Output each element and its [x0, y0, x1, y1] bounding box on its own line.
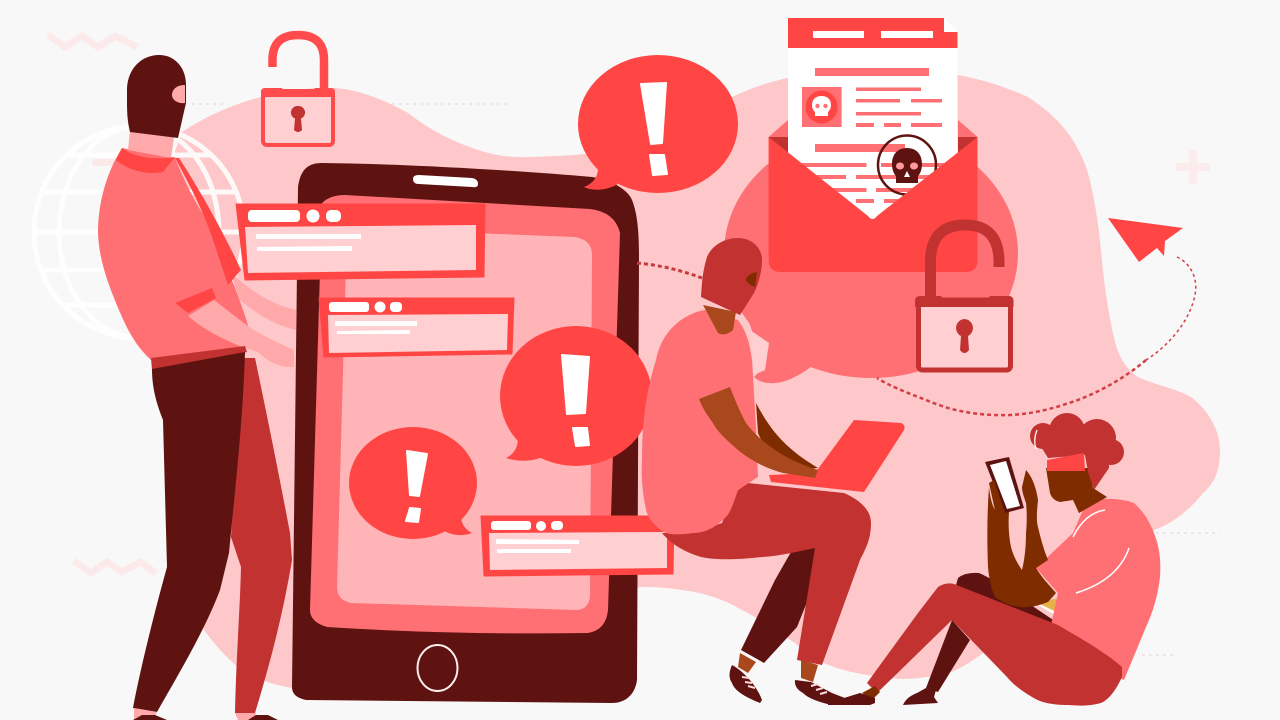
dotted flight path: [877, 257, 1196, 415]
hacker balaclava: [127, 55, 186, 138]
front thigh and shin: [867, 583, 1122, 706]
hacker front leg: [133, 352, 245, 712]
background blob: [150, 75, 1220, 688]
front ankle: [801, 660, 818, 682]
globe outline: [34, 126, 244, 338]
envelope back flap: [769, 120, 978, 137]
back shoe: [730, 665, 762, 703]
back arm: [756, 403, 818, 470]
back leg: [741, 545, 830, 663]
hacker neck: [128, 130, 174, 158]
collar highlight: [750, 330, 769, 375]
document sheet: [788, 40, 958, 225]
dotted path: phone to person: [637, 263, 702, 278]
head and neck: [1046, 468, 1107, 513]
document header: [788, 18, 958, 48]
phone inner screen: [337, 228, 592, 610]
back shoe: [903, 688, 938, 705]
document thumbnail skull: [802, 87, 842, 127]
front shoe: [795, 680, 850, 705]
large padlock keyhole: [956, 319, 973, 353]
front shoe: [828, 693, 875, 705]
hacker figure: [98, 55, 296, 720]
hair: [1030, 413, 1124, 490]
large padlock body: [918, 300, 1010, 370]
hacker shoes: [133, 715, 278, 720]
waist highlight: [1038, 598, 1060, 618]
person with smartphone: [828, 413, 1160, 706]
padlock keyhole: [291, 106, 305, 132]
phone home button: [418, 645, 458, 691]
smartphone: [292, 163, 639, 703]
decorative zigzag: lower left: [74, 561, 156, 573]
open padlock: top: [261, 35, 335, 145]
torso: [642, 310, 758, 534]
smartphone in hand: [985, 457, 1024, 513]
speech bubble: middle alert: [500, 326, 652, 466]
waist shadow: [956, 573, 1058, 630]
phone speaker: [413, 175, 478, 187]
hacker back leg: [231, 358, 292, 713]
alert card one: [236, 204, 485, 280]
shirt folds: [1073, 510, 1129, 593]
hacker forearm and hand: [188, 300, 294, 367]
decorative plus sign: [1176, 150, 1210, 184]
speech bubble: lower alert: [349, 427, 477, 539]
back ankle: [738, 653, 756, 673]
large padlock shackle: [930, 225, 999, 297]
paper plane: [1108, 218, 1183, 262]
front ankle: [862, 686, 880, 700]
person with laptop: [642, 238, 905, 705]
padlock shackle: [272, 35, 324, 92]
raised arms: [987, 470, 1056, 607]
envelope with document: [769, 18, 978, 272]
hacker ankles: [134, 708, 256, 720]
hacker collar: [116, 148, 175, 173]
phone screen frame: [310, 195, 620, 633]
hacker sleeve cuff: [175, 288, 216, 313]
envelope front: [769, 137, 978, 272]
hacker waistband: [151, 346, 247, 370]
hair highlight: [1035, 430, 1037, 449]
document text lines: [800, 68, 945, 203]
open padlock: large: [915, 225, 1014, 370]
padlock body: [263, 91, 333, 145]
blindfold: [1047, 453, 1085, 471]
alert card three: [481, 516, 674, 576]
phone body: [292, 163, 639, 703]
front arm: [699, 387, 818, 478]
back shin: [926, 620, 970, 692]
envelope back corners: [769, 137, 978, 155]
decorative zigzag: top left: [48, 35, 137, 47]
thigh and front leg: [662, 483, 871, 665]
shirt: [1036, 499, 1160, 680]
alert card two: [319, 298, 514, 357]
hacker face opening: [172, 85, 185, 103]
hacker torso: [98, 148, 249, 360]
hood: [701, 238, 762, 315]
laptop: [769, 420, 905, 492]
neck: [703, 305, 736, 334]
speech bubble: large envelope backdrop: [724, 128, 1018, 383]
speech bubble: top alert: [578, 55, 738, 193]
hacker back arm: [230, 272, 296, 330]
hood eye opening: [746, 272, 757, 287]
fingers: [989, 480, 1005, 515]
skull stamp: [878, 136, 936, 194]
hacker shirt stripe: [175, 158, 241, 285]
